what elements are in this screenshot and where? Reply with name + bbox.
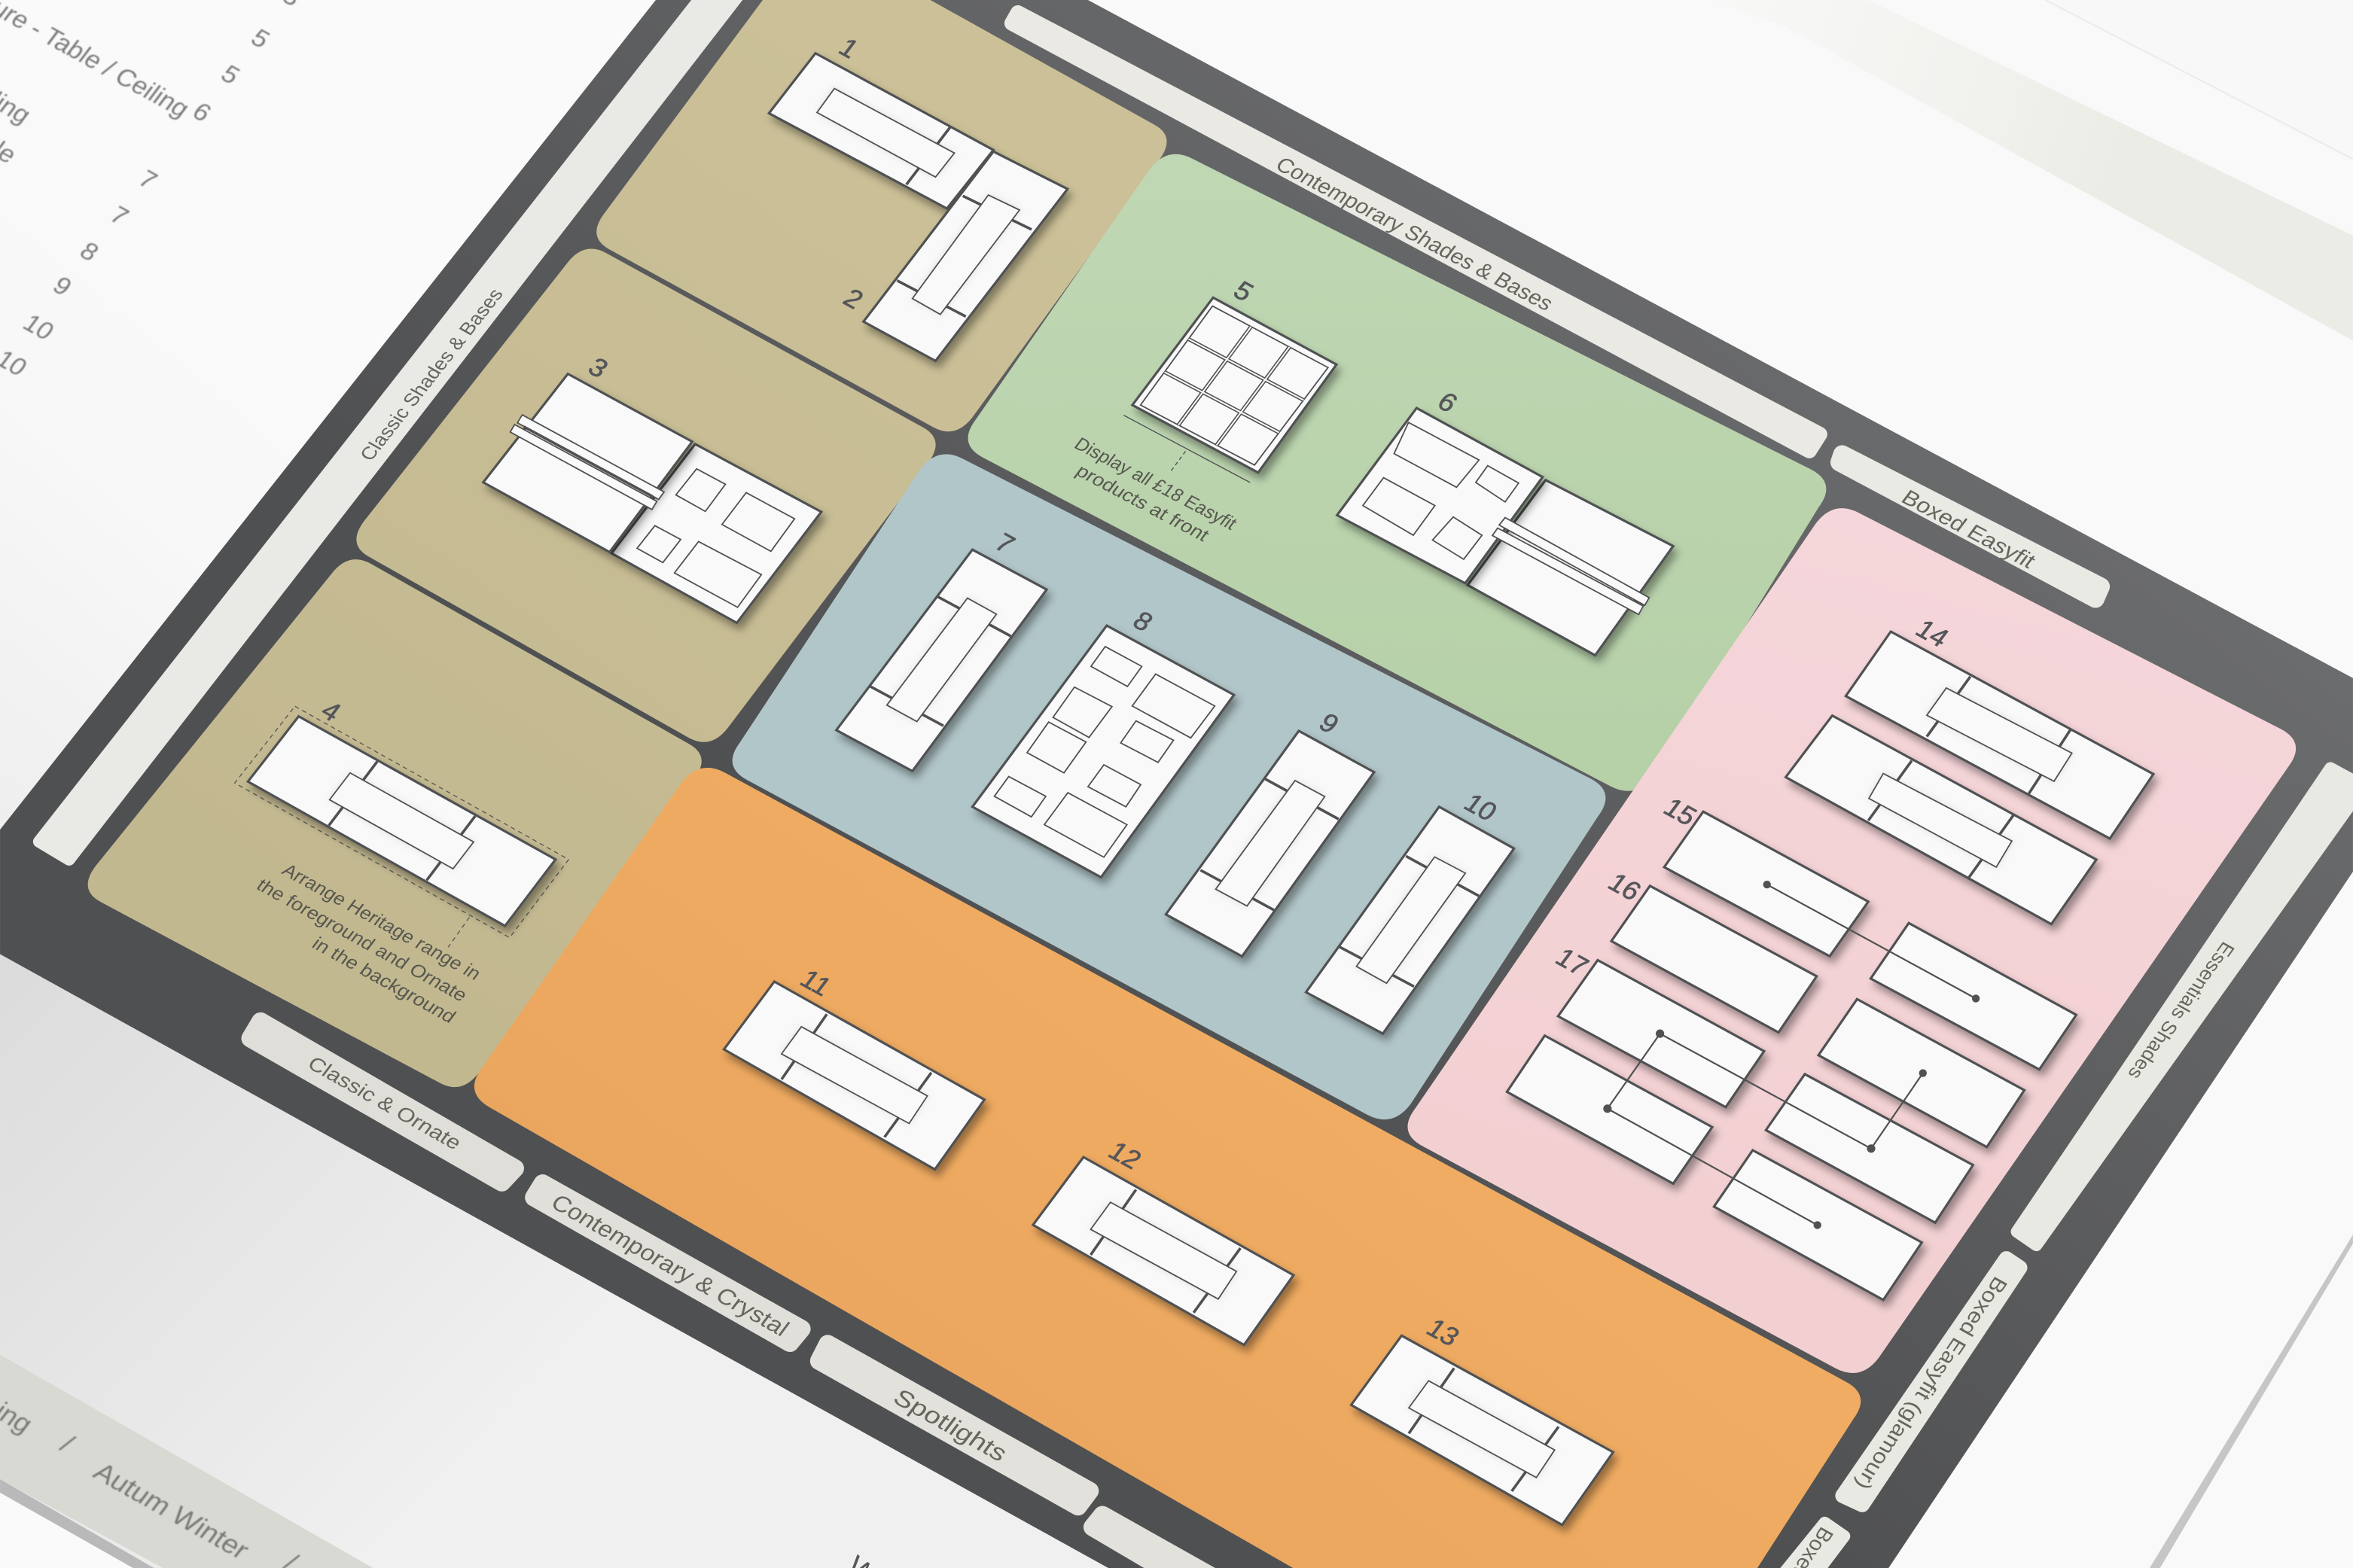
header band: upper right (1711, 0, 2353, 340)
panel: classic cards 1 and 2 (596, 0, 1167, 431)
card 6: 6 (1432, 387, 1463, 418)
panel background (474, 768, 1861, 1568)
paper edge: lower right (2149, 1235, 2353, 1568)
card 9: 9 (1313, 708, 1345, 739)
card 12: 12 (1103, 1136, 1147, 1175)
tab: classic and ornate (250, 1021, 515, 1183)
footer text: seasons (0, 1397, 303, 1568)
card 17 (1507, 942, 1973, 1300)
note: display all easyfit: Display all £18 Easyfit (1070, 434, 1241, 534)
page number: 8 (75, 237, 104, 266)
tab: classic shades and bases (39, 0, 745, 860)
tab: boxed easyfit (1839, 454, 2101, 599)
tab: boxed easyfit glamour (1842, 1259, 2020, 1505)
card 16: 16 (1602, 868, 1647, 906)
tab: essentials shades (2017, 768, 2353, 1245)
page number: 5 (245, 24, 275, 53)
card 17: 17 (1550, 942, 1594, 981)
card 8 (972, 606, 1234, 877)
card 5: 5 (1228, 276, 1259, 307)
panel background (356, 249, 936, 742)
card 3 (483, 352, 821, 623)
card 10 (1306, 788, 1514, 1034)
tab: classic shades and bases: Classic Shades & Bases (356, 285, 507, 464)
panel background (596, 0, 1167, 431)
tab: essentials shades: Essentials Shades (2123, 939, 2239, 1082)
card 1 (769, 32, 993, 209)
card 2 (838, 151, 1068, 361)
card 4 (235, 696, 568, 947)
card 11: 11 (794, 964, 837, 1002)
bracket line under card 5 (1123, 416, 1250, 483)
panel background (88, 559, 702, 1087)
card 6 (1337, 387, 1673, 656)
card 12 (1033, 1136, 1294, 1345)
panel: orange spotlights (474, 768, 1861, 1568)
tab: boxed easyfit: Boxed Easyfit (1897, 486, 2040, 573)
panel: pink boxed easyfit (1407, 508, 2296, 1373)
panel: contemporary shades (968, 154, 1826, 791)
panel: classic card 4 (88, 559, 702, 1087)
card 9 (1166, 708, 1374, 956)
footer separator: / (55, 1430, 80, 1457)
tab: contemporary shades and bases (1012, 13, 1820, 451)
page number: 7 (105, 201, 134, 230)
card 5 (1132, 276, 1337, 473)
panel: essentials blue (733, 454, 1605, 1119)
paper surface corner (2159, 1244, 2353, 1568)
tab: spotlights: Spotlights (888, 1384, 1013, 1466)
paper top edge: upper right (2045, 0, 2353, 159)
note: arrange heritage range: in the background (308, 933, 460, 1028)
card 15 (1658, 793, 2076, 1070)
card 4: 4 (315, 696, 346, 727)
footer word: autumn winter: Autum Winter (88, 1457, 255, 1565)
panel background (968, 154, 1826, 791)
card 14 upper (1846, 614, 2153, 839)
note: display all easyfit: products at front (1071, 461, 1213, 546)
card 7 (837, 528, 1047, 771)
card 1: 1 (834, 32, 864, 64)
page number: 5 (215, 60, 245, 90)
page number: 7 (133, 165, 163, 195)
note: arrange heritage range: Arrange Heritage range in (278, 860, 485, 984)
card 11 (724, 964, 984, 1169)
tab: boxed easyfit glamour: Boxed Easyfit (glamour) (1851, 1273, 2012, 1493)
note: arrange heritage range: the foreground and Ornate (252, 875, 471, 1006)
card 16 (1602, 868, 2024, 1147)
page number: 10 (17, 309, 59, 346)
card 10: 10 (1458, 788, 1503, 827)
panel: classic card 3 (356, 249, 936, 742)
page surface: right (1088, 0, 2353, 1568)
page footer band: lower left (0, 1355, 375, 1568)
panel background (1407, 508, 2296, 1373)
card 3: 3 (583, 352, 614, 383)
card 14 lower (1786, 716, 2096, 924)
card 8: 8 (1127, 606, 1159, 637)
note: arrange heritage range (252, 860, 485, 1028)
tab: spotlights (819, 1344, 1090, 1506)
card 15: 15 (1658, 793, 1702, 831)
tab: cut off (1093, 1515, 1247, 1568)
card 7: 7 (989, 528, 1020, 559)
tab: classic and ornate: Classic & Ornate (303, 1052, 466, 1154)
page number: 6 (187, 97, 217, 127)
panel background (733, 454, 1605, 1119)
page surface: upper left (0, 0, 660, 840)
card 13: 13 (1421, 1313, 1465, 1352)
card 2: 2 (838, 283, 869, 315)
paper surface lower corner (0, 1493, 135, 1568)
tab: contemporary and crystal: Contemporary & Crystal (546, 1189, 794, 1341)
page number: 9 (47, 272, 77, 301)
card 14 upper: 14 (1910, 614, 1955, 653)
card 13 (1351, 1313, 1613, 1525)
paper edge: lower left (0, 1479, 156, 1568)
page surface: lower left (0, 945, 1141, 1568)
contents list (0, 0, 306, 382)
tab: contemporary shades and bases: Contemporary Shades & Bases (1271, 153, 1558, 315)
